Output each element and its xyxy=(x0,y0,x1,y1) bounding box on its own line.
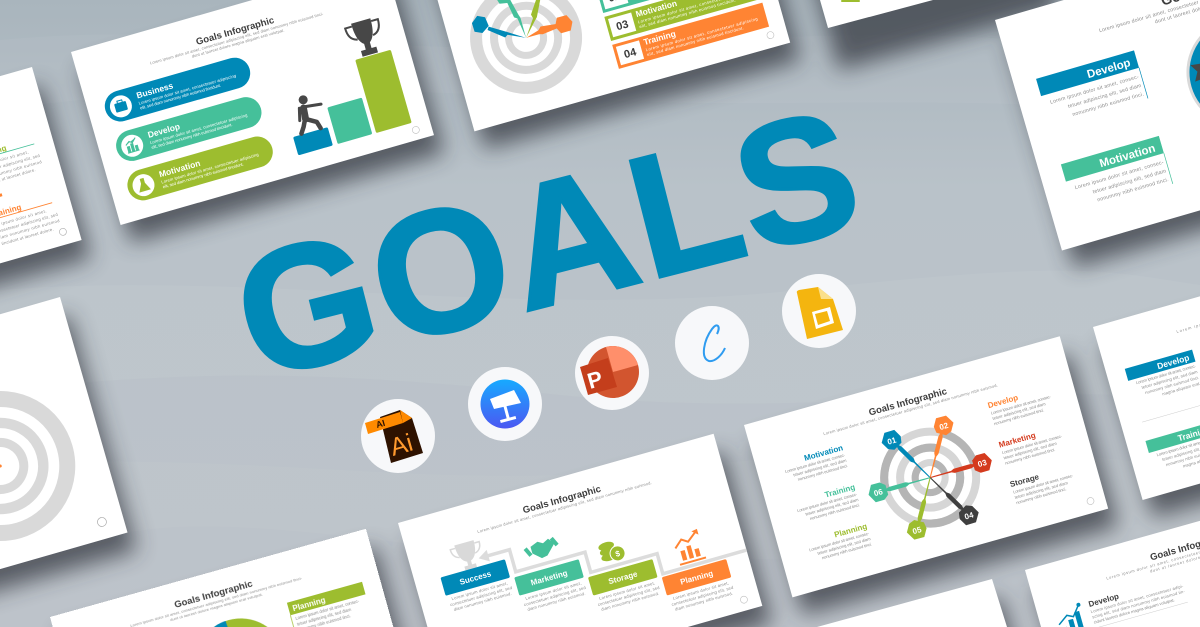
pill: Business: Business xyxy=(135,80,175,100)
label: Storage: consectetuer adipiscing elit, sed xyxy=(597,585,661,607)
dart 01 xyxy=(878,426,936,484)
label: Planning: Lorem ipsum dolor sit amet, xyxy=(672,580,729,601)
page number xyxy=(59,228,67,236)
list item 04: Training xyxy=(642,28,677,47)
fragment: Marketing accent xyxy=(0,193,2,198)
dart numbers: 04 xyxy=(964,510,975,522)
label: Success: Lorem ipsum dolor sit amet, xyxy=(451,581,508,601)
icon: rising chart xyxy=(672,529,706,566)
pie chart xyxy=(184,608,297,627)
label: Success: consectetuer adipiscing elit, sed xyxy=(450,585,513,607)
banner: Training xyxy=(1145,422,1200,477)
subtitle text: dunt ut laoreet dolore magna aliquam erat volutpat. xyxy=(170,592,263,622)
label: Storage: diam nonummy nibh euismod. xyxy=(601,591,660,612)
right text: Storage: Lorem ipsum dolor sit amet, consec- xyxy=(1013,473,1074,495)
left text: Planning: Planning xyxy=(833,522,868,539)
app icon: Illustrator xyxy=(361,399,435,473)
banner: Planning: Planning xyxy=(292,595,327,613)
list item 02 xyxy=(596,0,753,13)
list item 04: Lorem ipsum dolor sit amet, consectetuer adipiscing xyxy=(645,16,759,52)
dart 02 xyxy=(921,413,955,480)
pill: Motivation xyxy=(124,133,276,204)
page number xyxy=(740,595,748,604)
left text: Training: nonummy nibh euismod tinci. xyxy=(809,502,861,521)
dart numbers: 02 xyxy=(938,421,950,432)
slide: large develop and motivation xyxy=(995,0,1200,250)
icon: chart xyxy=(1055,602,1089,627)
right text: Develop xyxy=(987,384,1055,426)
list item 04: 04 xyxy=(623,46,639,61)
target rings xyxy=(853,400,1008,555)
dart tip xyxy=(0,464,2,468)
slide: right develop and training xyxy=(1093,237,1200,500)
dart 03 xyxy=(928,452,994,486)
slide: business steps xyxy=(71,0,434,225)
label: Marketing: consectetuer adipiscing elit, sed xyxy=(523,585,587,607)
icon: trophy xyxy=(344,16,387,59)
dart numbers: 03 xyxy=(977,458,988,469)
slide: top centre right xyxy=(820,0,933,28)
right text: Marketing xyxy=(998,424,1066,466)
banner: Motivation xyxy=(1061,136,1173,212)
target rings xyxy=(464,0,588,100)
subtitle text: dunt ut laoreet dolore magna aliquam erat volutpat. xyxy=(191,27,285,59)
banner: Develop: Develop xyxy=(1086,57,1132,81)
dart numbers: 06 xyxy=(873,487,884,498)
slide: target with numbered list xyxy=(426,0,790,131)
heading: Goals Infographic xyxy=(173,579,254,611)
dart 04 xyxy=(924,471,982,529)
slide: bottom centre blank xyxy=(817,579,1007,627)
dart numbers: 05 xyxy=(912,525,923,536)
label: Marketing: Marketing xyxy=(530,568,569,587)
right text: Develop: nonummy nibh euismod tinci. xyxy=(993,407,1045,426)
left text: Training: Lorem ipsum dolor sit amet, consec- xyxy=(797,491,858,513)
banner: Planning xyxy=(287,582,373,627)
entry: Planning fragment xyxy=(0,135,44,198)
left text: Motivation: nonummy nibh euismod tinci. xyxy=(797,463,848,482)
banner: Develop: tetuer adipiscing elit, sed diam xyxy=(1067,83,1142,110)
subtitle text: Lorem ipsum dolor sit amet, consectetuer adipiscing elit, sed diam nonummy nibh euismod tinci- xyxy=(149,11,324,66)
entry: Develop: cidunt laoreet dolore magna aliquam volutpat. xyxy=(1093,597,1175,625)
right text: Storage: tetuer adipiscing elit, sed diam xyxy=(1014,480,1069,500)
banner: Develop: nonummy nibh euismod tinci. xyxy=(1144,375,1200,395)
app icon: Canva xyxy=(675,306,749,380)
label: Marketing: diam nonummy nibh euismod. xyxy=(527,591,586,612)
subtitle text: Lorem ipsum dolor sit amet, consectetuer adipiscing elit, sed diam nonummy nibh euismod. xyxy=(477,480,652,534)
pill: Develop: Lorem ipsum dolor sit amet, consectetuer adipiscing xyxy=(149,112,248,145)
left text: Motivation: Lorem ipsum dolor sit amet, consec- xyxy=(784,452,846,474)
target circle xyxy=(1175,5,1200,139)
dart numbers xyxy=(860,413,1001,543)
app icon: PowerPoint xyxy=(575,336,649,410)
right text: Storage xyxy=(1009,463,1077,505)
banner: Develop xyxy=(1036,50,1148,127)
icon: handshake xyxy=(522,536,561,562)
page number xyxy=(766,31,775,39)
divider xyxy=(1142,373,1200,422)
banner: Develop xyxy=(1125,350,1200,404)
page number xyxy=(412,126,420,134)
app icon: PowerPoint: P xyxy=(584,366,605,394)
dart: teal xyxy=(491,0,526,43)
banner: Develop: Develop xyxy=(1156,352,1190,371)
banner: Develop: Lorem ipsum dolor sit amet, consec- xyxy=(1049,74,1140,106)
title: GOALS: GOALS xyxy=(217,70,879,416)
pill: Business: elit, sed diam nonummy nibh euismod tincidunt. xyxy=(139,83,222,111)
label: Planning xyxy=(662,559,736,613)
arrow path xyxy=(477,482,747,621)
entry: Develop: Lorem ipsum dolor sit amet, consectetuer adipi- xyxy=(1090,583,1184,614)
label: Planning: Planning xyxy=(679,569,714,587)
page number xyxy=(96,516,107,528)
left text: Training: Training xyxy=(824,482,856,500)
right text: Develop: Lorem ipsum dolor sit amet, consec- xyxy=(990,394,1052,416)
dart: blue xyxy=(467,3,526,52)
pill: Business xyxy=(101,54,254,125)
banner: Develop: Lorem ipsum dolor sit amet, consec- xyxy=(1135,363,1197,385)
left text: Motivation: tetuer adipiscing elit, sed diam xyxy=(793,458,847,477)
left text: Planning: nonummy nibh euismod tinci. xyxy=(821,541,873,560)
left text: Planning: tetuer adipiscing elit, sed diam xyxy=(817,536,872,556)
banner: Planning: Lorem ipsum dolor sit amet, consec- xyxy=(295,598,360,621)
subtitle text: Lorem ipsum dolor sit amet, consectetuer adipiscing elit, sed diam nonummy nibh euismod tinci- xyxy=(130,575,303,627)
dart: orange xyxy=(523,14,575,43)
subtitle text xyxy=(1106,527,1200,586)
banner: Motivation: Motivation xyxy=(1098,143,1157,170)
pill: Motivation: elit, sed diam nonummy nibh euismod tincidunt. xyxy=(162,161,244,189)
entry: Develop: scing elit, sed diam nonummy nibh euismod tin- xyxy=(1092,589,1186,619)
pill: Develop: Develop xyxy=(146,121,181,140)
icon: coins: $ xyxy=(614,549,622,559)
banner: Motivation: Lorem ipsum dolor sit amet, consec- xyxy=(1074,160,1165,191)
icon: trophy xyxy=(449,539,486,573)
label: Storage xyxy=(588,559,663,613)
app icon: Keynote xyxy=(468,367,542,441)
left text: Training: tetuer adipiscing elit, sed diam xyxy=(805,497,860,517)
icon: coins xyxy=(597,538,627,565)
label: Success: diam nonummy nibh euismod. xyxy=(453,591,512,612)
banner: Planning: tetuer adipiscing elit, sed diam xyxy=(296,607,352,627)
label: Storage: Lorem ipsum dolor sit amet, xyxy=(598,580,656,601)
icon: climbing person xyxy=(291,91,327,134)
banner: Develop: tetuer adipiscing elit, sed diam xyxy=(1141,369,1198,390)
subtitle text: Lorem ipsum dolor sit amet, consectetuer adipiscing elit, sed diam nonummy nibh euismod. xyxy=(823,382,998,436)
dart 05 xyxy=(906,475,939,542)
slide: bottom right develop chart xyxy=(1025,481,1200,627)
right text: Marketing: Lorem ipsum dolor sit amet, consec- xyxy=(1001,433,1063,455)
dart: olive xyxy=(511,0,565,38)
banner: Motivation: tetuer adipiscing elit, sed diam xyxy=(1092,168,1167,195)
left text: Motivation xyxy=(782,443,849,485)
slide: dartboard with six darts xyxy=(744,336,1108,597)
label: Storage: Storage xyxy=(607,569,639,586)
slide: process staircase xyxy=(398,434,762,627)
right text: Marketing: Marketing xyxy=(998,431,1037,450)
heading: Goals Infographic xyxy=(522,484,602,516)
pill: Develop xyxy=(112,93,265,165)
pill: Motivation: Lorem ipsum dolor sit amet, consectetuer adipiscing xyxy=(161,152,260,185)
entry: Training fragment: tincidunt ut laoreet dolore. xyxy=(1,226,54,246)
pill: Business: Lorem ipsum dolor sit amet, consectetuer adipiscing xyxy=(138,73,237,106)
list item 03: 03 xyxy=(615,18,630,33)
banner: Develop: nonummy nibh euismod tinci. xyxy=(1072,92,1145,118)
right text: Marketing: tetuer adipiscing elit, sed diam xyxy=(1003,441,1058,460)
heading: Goals Infographic xyxy=(195,15,276,48)
entry: Develop xyxy=(1088,574,1188,627)
banner: Motivation: nonummy nibh euismod tinci. xyxy=(1097,177,1169,203)
right text: Develop: tetuer adipiscing elit, sed diam xyxy=(992,401,1047,421)
pill: Motivation: Motivation xyxy=(158,158,201,179)
label: Planning: consectetuer adipiscing elit, sed xyxy=(671,585,734,607)
app icon: Illustrator: AI xyxy=(375,418,386,430)
slide: pie and planning xyxy=(50,529,414,627)
label: Planning: diam nonummy nibh euismod. xyxy=(674,591,733,612)
left text: Planning xyxy=(806,522,873,563)
left text: Planning: Lorem ipsum dolor sit amet, consec- xyxy=(809,531,870,552)
step bars xyxy=(277,50,412,155)
right text: Storage: Storage xyxy=(1009,472,1041,489)
pill: Develop: elit, sed diam nonummy nibh euismod tincidunt. xyxy=(151,122,233,150)
label: Marketing xyxy=(514,559,589,613)
list item 03 xyxy=(604,0,761,41)
list item 04 xyxy=(612,3,769,69)
right text: Storage: nonummy nibh euismod tinci. xyxy=(1016,486,1067,505)
list item 04: elit, sed diam nonummy nibh euismod tincidunt. xyxy=(646,25,744,57)
entry: Develop: Develop xyxy=(1088,592,1120,609)
app icon: Illustrator: Ai xyxy=(387,429,416,462)
dart 06 xyxy=(866,469,933,504)
right text: Marketing: nonummy nibh euismod tinci. xyxy=(1004,447,1056,466)
page number xyxy=(1086,497,1095,505)
label: Success xyxy=(440,559,515,613)
slide: top left list xyxy=(0,67,82,328)
entry: Training fragment xyxy=(0,193,62,258)
target rings xyxy=(0,383,83,549)
slide: large target xyxy=(0,297,128,627)
label: Success: Success xyxy=(459,569,493,587)
dart numbers: 01 xyxy=(886,435,898,447)
left text: Training xyxy=(794,482,861,524)
label: Marketing: Lorem ipsum dolor sit amet, xyxy=(525,580,582,601)
app icon: Google Slides xyxy=(782,274,856,348)
left text: Motivation: Motivation xyxy=(803,443,844,463)
right text: Develop: Develop xyxy=(987,393,1019,410)
heading: Goals Infographic xyxy=(868,386,948,419)
